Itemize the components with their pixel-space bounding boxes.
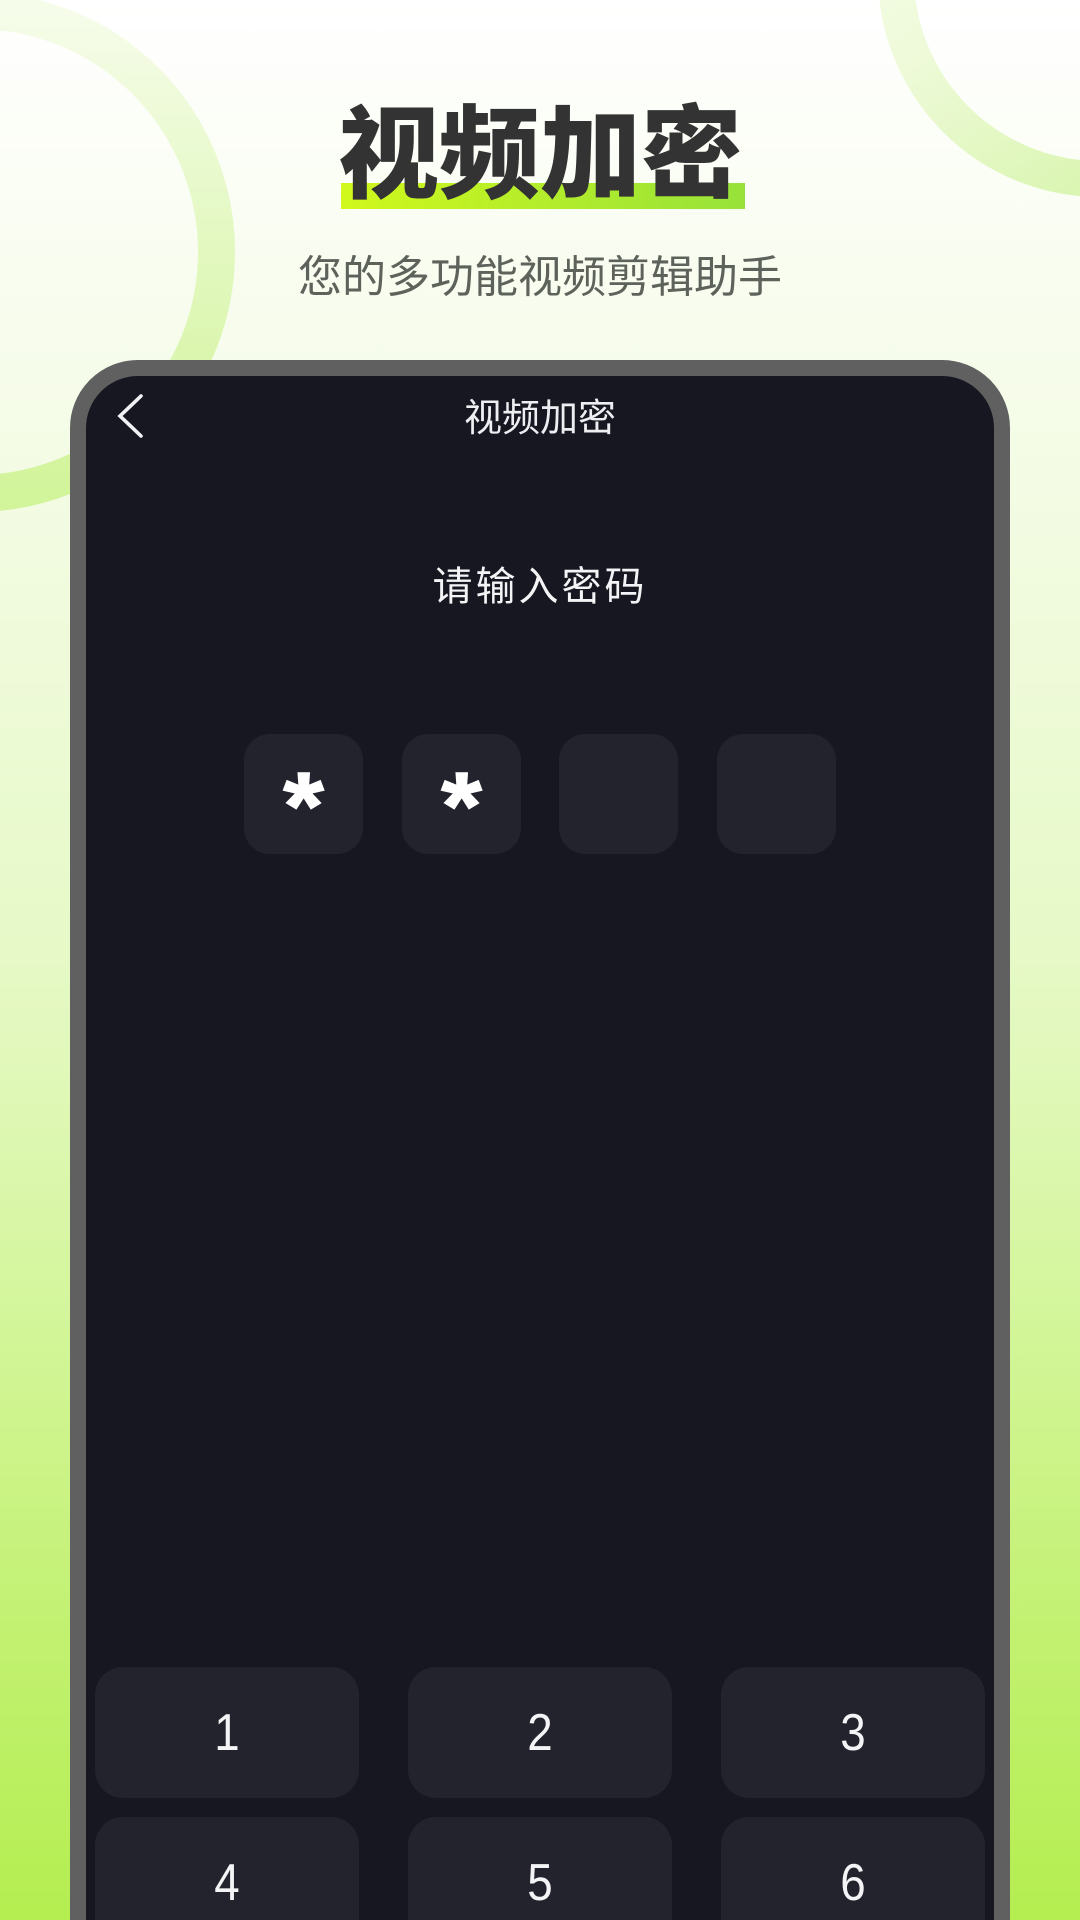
key 6: 6 [840, 1854, 866, 1912]
key 5: 5 [527, 1854, 553, 1912]
password box 1: * [283, 753, 324, 860]
password box 1 [244, 734, 363, 854]
key 5 [408, 1817, 672, 1920]
password box 2 [402, 734, 521, 854]
key 4 [95, 1817, 359, 1920]
screen title: 视频加密 [464, 387, 616, 442]
title: 视频加密 [338, 74, 742, 220]
phone mockup [70, 360, 1010, 1920]
password box 2: * [441, 753, 482, 860]
key 4: 4 [214, 1854, 240, 1912]
password prompt: 请输入密码 [432, 554, 648, 612]
subtitle: 您的多功能视频剪辑助手 [298, 241, 782, 305]
icon: back chevron [118, 394, 143, 438]
password box 4 [717, 734, 836, 854]
decorative ring left [0, 10, 216, 494]
decorative ring right [896, 0, 1080, 179]
key 2 [408, 1667, 672, 1798]
key 1: 1 [214, 1704, 240, 1762]
key 1 [95, 1667, 359, 1798]
password box 3 [559, 734, 678, 854]
key 6 [721, 1817, 985, 1920]
key 3: 3 [840, 1704, 866, 1762]
key 2: 2 [527, 1704, 553, 1762]
title highlight bar [341, 183, 745, 209]
key 3 [721, 1667, 985, 1798]
